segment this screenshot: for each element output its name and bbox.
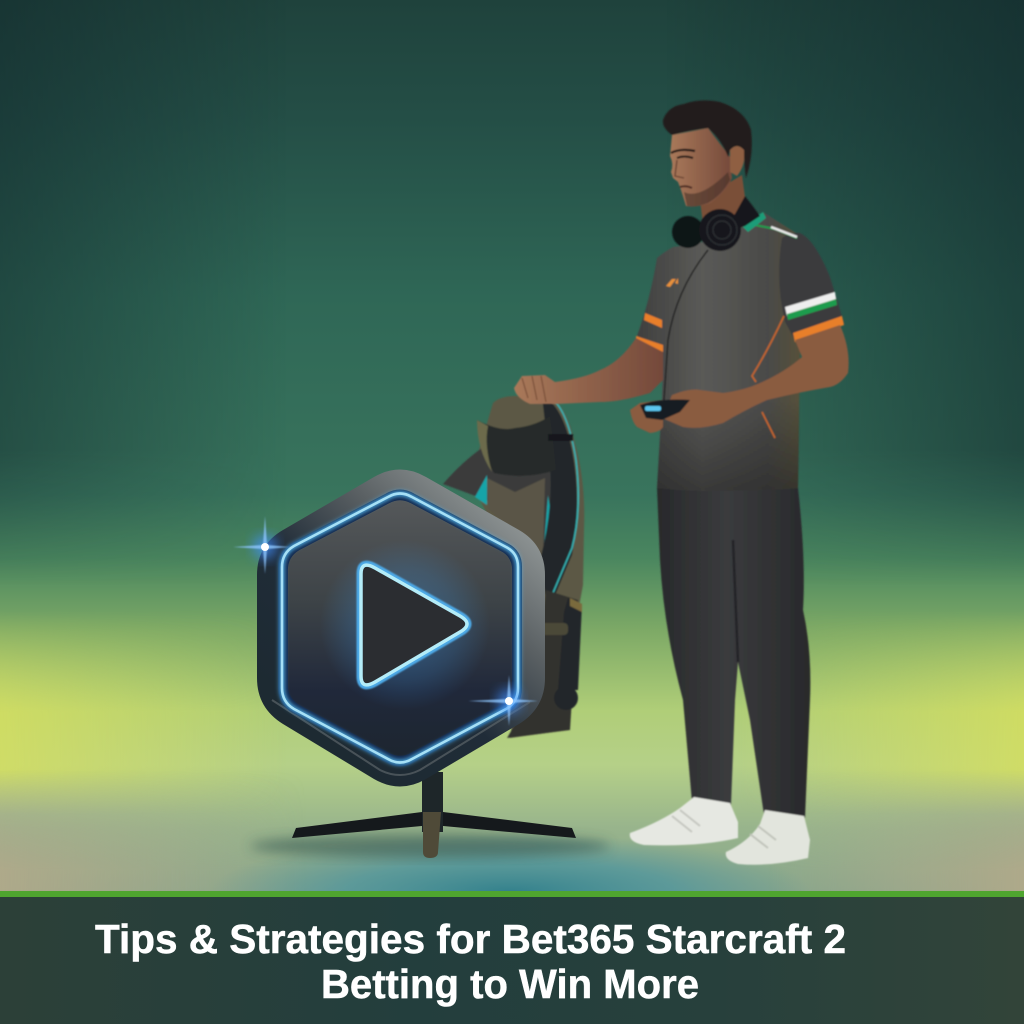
play glow [320, 540, 490, 710]
right sleeve [779, 233, 844, 340]
left sleeve cuff stripes [636, 336, 663, 352]
eyebrow and eye [671, 150, 695, 153]
shirt hem shadow [657, 400, 800, 491]
hexagon outer shell [257, 470, 545, 786]
headphones [672, 196, 760, 251]
chair base with pole and star legs [250, 772, 610, 858]
stubble shade [684, 172, 730, 207]
trousers [657, 488, 810, 818]
arm with controller [662, 325, 849, 428]
play triangle bright outline [361, 565, 467, 685]
shirt piping [752, 316, 784, 438]
trouser crease [733, 540, 738, 662]
dark panel [0, 897, 1024, 1024]
headrest pillow [477, 416, 556, 476]
bottom title band [0, 891, 1024, 1024]
face [670, 128, 732, 207]
hand fingers [522, 376, 546, 402]
ear [730, 146, 744, 176]
seat cushions [443, 448, 556, 570]
left shoe [630, 797, 738, 845]
lower body [507, 590, 578, 738]
lower bevel rim [272, 700, 530, 775]
arm holding chair [514, 338, 663, 404]
right shoe [726, 810, 810, 865]
hexagon play button icon [233, 470, 545, 786]
nose shade [675, 160, 684, 178]
navy recess [282, 494, 518, 762]
neck cable [664, 250, 708, 400]
sparkle left [233, 516, 290, 574]
title text: Tips & Strategies for Bet365 Starcraft 2 [95, 916, 846, 962]
sparkle right [468, 675, 538, 726]
gaming chair backrest [443, 396, 584, 738]
chest logo [666, 278, 678, 287]
green divider line [0, 891, 1024, 897]
hair [663, 100, 752, 178]
neon ring glow [282, 494, 518, 762]
black side band [540, 396, 577, 612]
shirt body [637, 212, 800, 491]
title text: Betting to Win More [321, 961, 699, 1007]
inner dark panel [288, 500, 512, 756]
olive shell [470, 396, 584, 738]
game controller [640, 400, 690, 420]
left hand [630, 400, 663, 433]
play triangle [361, 565, 467, 685]
neon ring [282, 494, 518, 762]
man standing with controller [514, 100, 849, 865]
lips [680, 186, 692, 188]
neck [700, 175, 746, 240]
collar stripe [755, 225, 797, 238]
sleeve stripes [785, 292, 836, 316]
